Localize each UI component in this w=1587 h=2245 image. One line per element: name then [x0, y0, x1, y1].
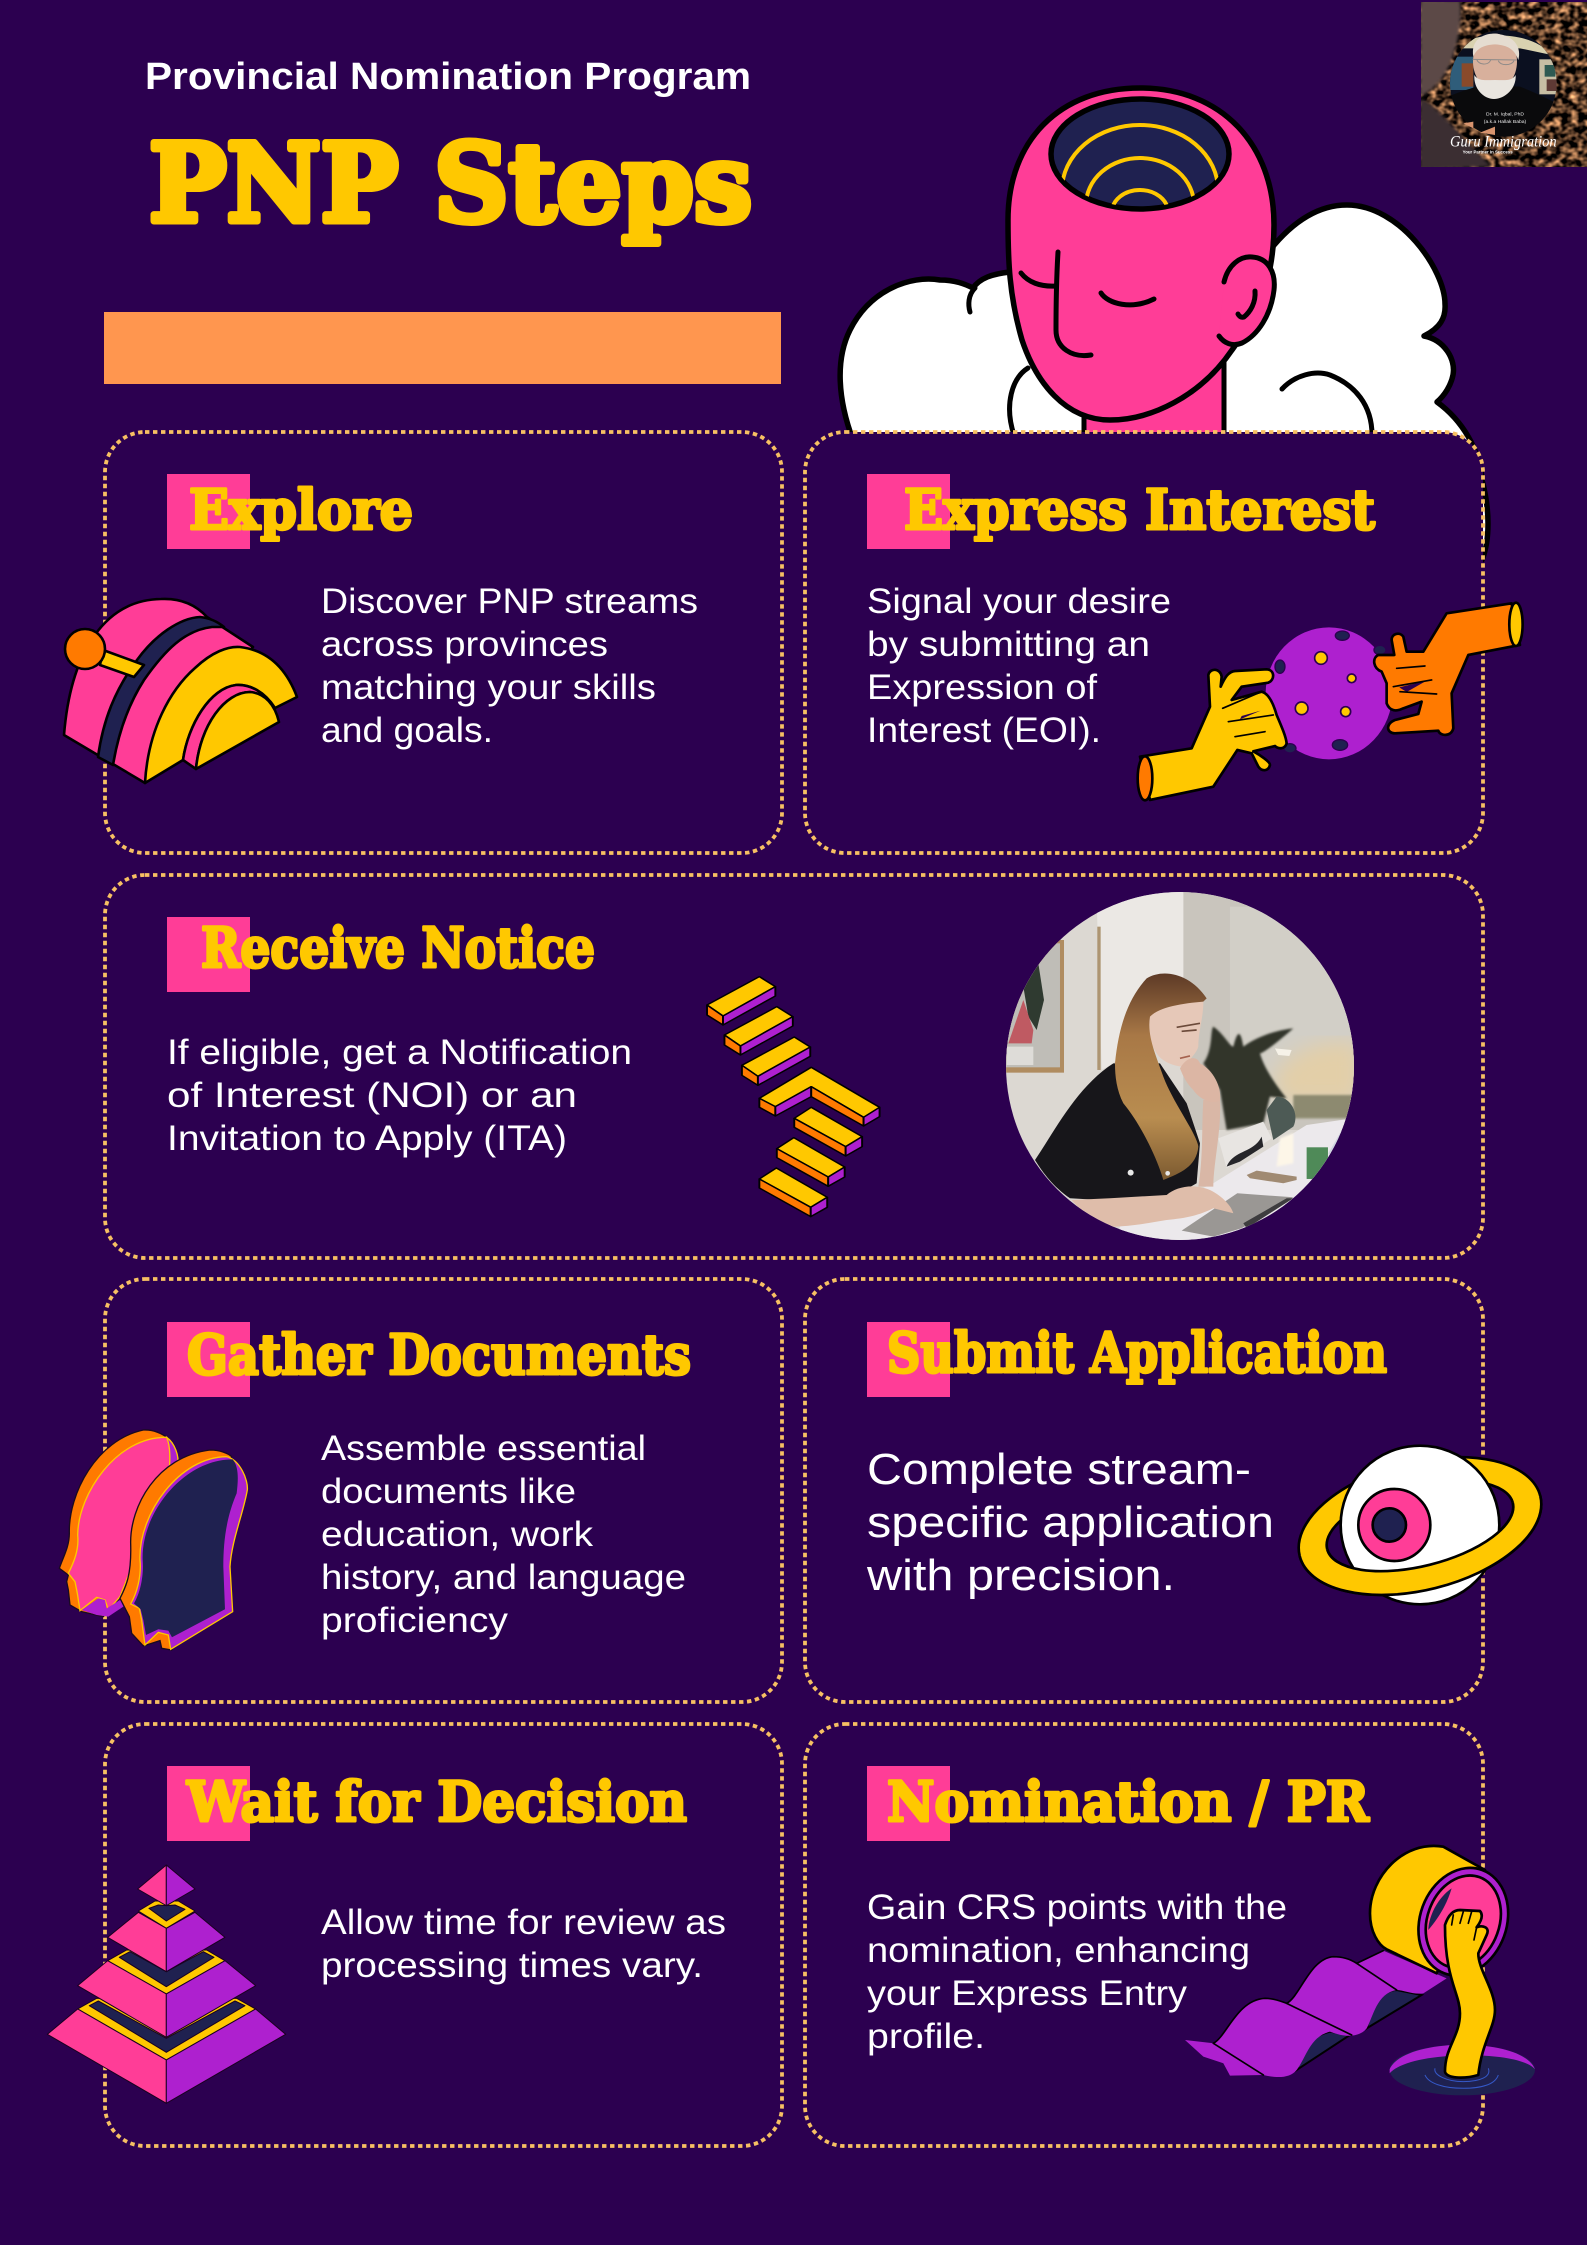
- body text: Express Interest: Interest (EOI).: [867, 711, 1101, 750]
- body text: Receive Notice: If eligible, get a Notification: [167, 1033, 632, 1072]
- heading: Wait for Decision: Wait for Decision: [186, 1769, 687, 1834]
- body text: Submit Application: [866, 1445, 1274, 1600]
- body text: Gather Documents: history, and language: [321, 1558, 686, 1597]
- body text: Gather Documents: documents like: [321, 1472, 576, 1511]
- body text: Express Interest: by submitting an: [867, 625, 1150, 664]
- sub-heading: Provincial Nomination Program: Provincial Nomination Program: [145, 56, 751, 98]
- heading marker: Gather Documents: [167, 1322, 250, 1397]
- body text: Nomination / PR: your Express Entry: [867, 1974, 1188, 2013]
- icon: eye planet with ring: [1297, 1444, 1543, 1606]
- heading: Submit Application: Submit Application: [887, 1320, 1387, 1385]
- body text: Receive Notice: of Interest (NOI) or an: [167, 1076, 577, 1115]
- body text: Explore: [321, 582, 698, 750]
- heading: Receive Notice: Receive Notice: [201, 915, 595, 980]
- heading marker: Explore: [167, 474, 250, 549]
- body text: Receive Notice: [167, 1033, 632, 1158]
- panel: Express Interest: [805, 432, 1523, 853]
- icon: isometric arches with knob: [64, 599, 297, 783]
- panel: Gather Documents: [59, 1279, 782, 1702]
- logo: Guru Immigration portrait: [1420, 0, 1587, 170]
- heading marker: Submit Application: [867, 1322, 950, 1397]
- body text: Explore: and goals.: [321, 711, 493, 750]
- icon: two isometric head profiles: [59, 1430, 247, 1650]
- icon: two hands holding a purple ball: [1138, 603, 1523, 800]
- body text: Submit Application: Complete stream-: [867, 1445, 1251, 1494]
- heading: Express Interest: Express Interest: [904, 477, 1376, 542]
- heading marker: Express Interest: [867, 474, 950, 549]
- body text: Nomination / PR: [867, 1888, 1287, 2056]
- illustration: head in clouds: [840, 88, 1488, 560]
- panel: Submit Application: [805, 1279, 1556, 1702]
- body text: Nomination / PR: Gain CRS points with the: [867, 1888, 1287, 1927]
- heading: Gather Documents: Gather Documents: [187, 1322, 691, 1387]
- photo: woman working on a laptop: [1000, 890, 1360, 1250]
- body text: Nomination / PR: nomination, enhancing: [867, 1931, 1250, 1970]
- body text: Express Interest: [867, 582, 1171, 750]
- logo: Guru Immigration portrait: Dr. M. Iqbal, PhD: [1486, 111, 1524, 117]
- logo: Guru Immigration portrait: (a.k.a Hallak Baba): [1484, 119, 1527, 125]
- body text: Wait for Decision: Allow time for review as: [321, 1903, 726, 1942]
- body text: Submit Application: specific application: [867, 1498, 1274, 1547]
- panel: Receive Notice: [105, 875, 1483, 1258]
- icon: isometric stairs: [707, 977, 880, 1217]
- body text: Receive Notice: Invitation to Apply (ITA): [167, 1119, 567, 1158]
- body text: Express Interest: Expression of: [867, 668, 1097, 707]
- panel: Explore: [64, 432, 782, 853]
- body text: Wait for Decision: processing times vary.: [321, 1946, 703, 1985]
- heading marker: Receive Notice: [167, 917, 250, 992]
- body text: Submit Application: with precision.: [866, 1551, 1175, 1600]
- panel: Nomination / PR: [805, 1724, 1535, 2146]
- heading marker: Nomination / PR: [867, 1766, 950, 1841]
- heading marker: Wait for Decision: [167, 1766, 250, 1841]
- body text: Gather Documents: [321, 1429, 686, 1640]
- body text: Gather Documents: proficiency: [321, 1601, 509, 1640]
- panel: Wait for Decision: [47, 1724, 782, 2146]
- icon: stacked pyramid: [47, 1865, 286, 2103]
- logo: Guru Immigration portrait: Guru Immigration: [1450, 134, 1557, 151]
- logo: Guru Immigration portrait: Your Partner in Success: [1463, 149, 1513, 154]
- heading: Explore: Explore: [189, 477, 413, 542]
- icon: tape roll pulled by a hand from a pool: [1185, 1846, 1535, 2095]
- body text: Explore: Discover PNP streams: [321, 582, 698, 621]
- body text: Wait for Decision: [321, 1903, 726, 1985]
- body text: Gather Documents: Assemble essential: [321, 1429, 646, 1468]
- heading: Nomination / PR: Nomination / PR: [887, 1769, 1370, 1834]
- title: PNP Steps: PNP Steps: [149, 121, 752, 247]
- body text: Nomination / PR: profile.: [867, 2017, 985, 2056]
- body text: Express Interest: Signal your desire: [867, 582, 1171, 621]
- body text: Gather Documents: education, work: [321, 1515, 594, 1554]
- body text: Explore: matching your skills: [321, 668, 656, 707]
- body text: Explore: across provinces: [321, 625, 608, 664]
- orange banner bar: [104, 312, 781, 384]
